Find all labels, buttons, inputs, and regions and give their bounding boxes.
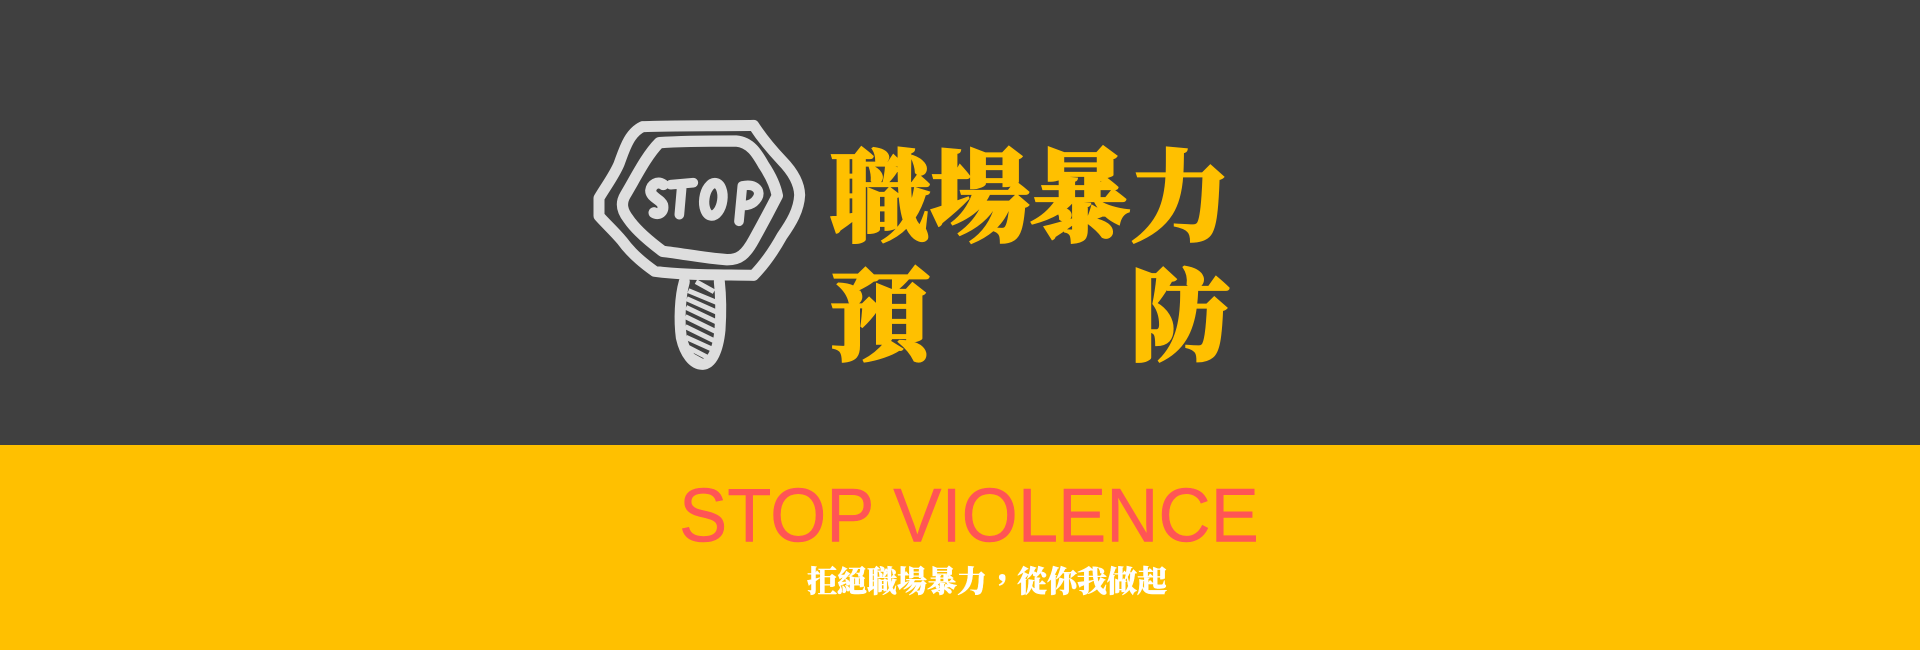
title: 預 — [830, 263, 930, 374]
title: 暴 — [1030, 144, 1130, 255]
title — [830, 144, 1230, 374]
icon text: STOP lettering — [651, 182, 759, 221]
title: 場 — [930, 144, 1030, 255]
heading: STOP VIOLENCE: STOP VIOLENCE — [679, 474, 1259, 558]
icon: stop sign — [594, 120, 806, 370]
subtitle: 拒絕職場暴力，從你我做起 — [807, 566, 1167, 599]
title: 防 — [1130, 263, 1230, 374]
title: 職 — [830, 144, 930, 255]
panel: dark top band — [0, 0, 1920, 445]
panel: yellow bottom band — [0, 445, 1920, 650]
title: 力 — [1130, 144, 1230, 255]
